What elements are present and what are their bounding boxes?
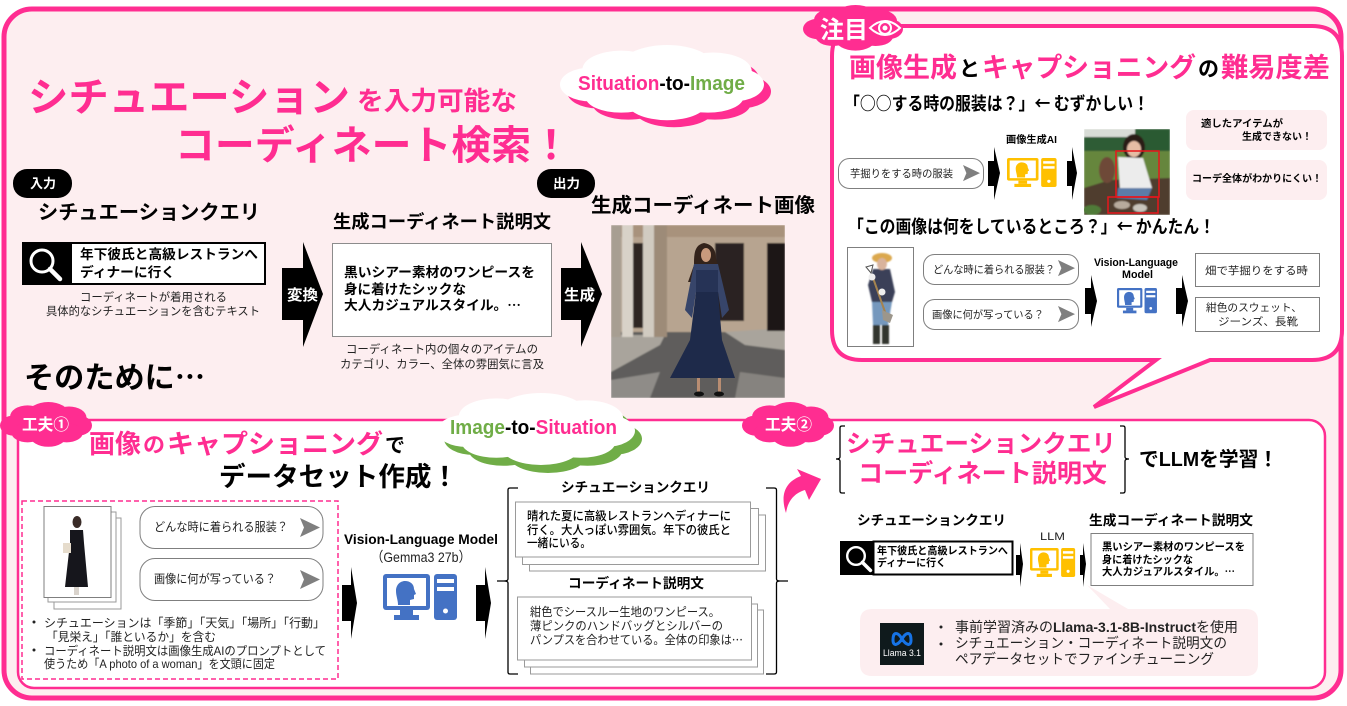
heading: caption dataset: で [385, 435, 405, 457]
callout: hard to see outfit [1186, 160, 1327, 200]
badge: idea 1: 工夫① [22, 411, 69, 435]
prompts: caption questions [924, 254, 1078, 330]
heading: LLM training [836, 426, 1278, 493]
heading: situation query: シチュエーションクエリ [38, 201, 260, 224]
cloud: Situation-to-Image: Situation-to-Image [578, 73, 745, 95]
bullets: ペアデータセットでファインチューニング [955, 651, 1214, 667]
arrow [1016, 543, 1023, 587]
search box small: 年下彼氏と高級レストランへ [877, 544, 1008, 557]
arrow [1085, 275, 1097, 327]
title: シチュエーション [28, 76, 350, 120]
vision language model: Vision-Language [1094, 257, 1178, 269]
arrow: curved pink [784, 469, 821, 513]
photo: woman in navy dress [611, 225, 785, 398]
prompt: digging [838, 158, 984, 188]
arrow: generate [561, 242, 602, 347]
heading: generated description: 生成コーディネート説明文 [333, 211, 551, 232]
notes: コーディネート説明文は画像生成AIのプロンプトとして [44, 643, 326, 658]
vision language model: Gemma3: （Gemma3 27b） [371, 549, 471, 565]
bullets [940, 619, 1238, 667]
search box: ディナーに行く [80, 264, 175, 280]
image generation AI: 画像生成AI [1006, 133, 1057, 146]
badge: idea 2: 工夫② [765, 411, 812, 435]
badge: attention [803, 5, 903, 51]
query caption: 具体的なシチュエーションを含むテキスト [46, 304, 260, 318]
description box small: 大人カジュアルスタイル。… [1102, 564, 1235, 579]
panel: bottom [18, 420, 1325, 688]
description box: 身に着けたシックな [344, 281, 466, 297]
dataset: situation query: 一緒にいる。 [527, 535, 591, 550]
label: situation query: シチュエーションクエリ [857, 513, 1006, 528]
callout: unsuitable items: 適したアイテムが [1201, 117, 1283, 130]
description box small: 身に着けたシックな [1102, 553, 1193, 566]
arrow [1080, 543, 1086, 587]
label: generated description: 生成コーディネート説明文 [1089, 512, 1254, 528]
heading: generated image: 生成コーディネート画像 [591, 193, 815, 217]
logo: Llama 3.1: Llama 3.1 [883, 648, 921, 658]
arrow: convert [282, 242, 323, 347]
description box small [1091, 534, 1253, 586]
query caption [46, 290, 260, 318]
arrow: generate: 生成 [564, 286, 595, 304]
description box: 大人カジュアルスタイル。… [344, 294, 521, 314]
panel: attention bubble [803, 5, 1342, 407]
question 1 [140, 506, 323, 548]
notes [32, 615, 326, 671]
arrow [342, 567, 357, 639]
arrow [1067, 147, 1077, 200]
notes: 使うため「A photo of a woman」を文頭に固定 [44, 656, 275, 671]
title: を入力可能な [357, 86, 517, 116]
query caption: コーディネートが着用される [80, 290, 227, 304]
title [28, 76, 571, 168]
description caption [340, 342, 544, 371]
notes: 「見栄え」「誰といるか」を含む [46, 629, 216, 644]
arrow: convert: 変換 [287, 286, 318, 304]
heading: difficulty gap: の [1198, 58, 1219, 81]
badge: output: 出力 [553, 176, 580, 191]
dataset: coordinate description: コーディネート説明文 [568, 575, 704, 591]
dataset: situation query: 行く。大人っぽい雰囲気。年下の彼氏と [527, 522, 731, 537]
image generation AI [1006, 133, 1057, 187]
question 2 [140, 558, 323, 600]
dataset: situation query: 晴れた夏に高級レストランへディナーに [527, 508, 731, 523]
dataset: situation query [516, 480, 766, 571]
badge: idea 2 [742, 402, 834, 447]
search box: 年下彼氏と高級レストランへ [80, 246, 259, 262]
image stack [44, 506, 121, 609]
callout: unsuitable items: 生成できない！ [1242, 130, 1312, 143]
dataset: situation query: シチュエーションクエリ [561, 480, 710, 495]
logo: Llama 3.1 [880, 623, 924, 665]
prompts: caption questions: 画像に何が写っている？ [932, 308, 1044, 321]
badge: output [537, 169, 595, 198]
heading: difficulty gap: キャプショニング [982, 52, 1196, 83]
vision language model: Model [1122, 269, 1153, 281]
answer boxes [1196, 254, 1320, 332]
icon: LLM computer [1030, 548, 1075, 577]
dataset: coordinate description: 紺色でシースルー生地のワンピース。 [530, 605, 720, 619]
heading: LLM training: コーディネート説明文 [858, 459, 1107, 488]
callout: unsuitable items [1186, 110, 1327, 150]
heading: caption dataset: データセット作成！ [219, 462, 458, 492]
description box [332, 244, 552, 336]
description box: 黒いシアー素材のワンピースを [344, 264, 535, 280]
cloud: Situation-to-Image [560, 45, 771, 127]
question 1: どんな時に着られる服装？ [154, 519, 288, 534]
answer boxes: 紺色のスウェット、 [1206, 301, 1302, 314]
heading: difficulty gap: 画像生成 [849, 53, 957, 83]
heading: caption dataset [89, 429, 458, 492]
bullets: シチュエーション・コーディネート説明文の [955, 635, 1227, 651]
text: therefore: そのために… [24, 353, 205, 397]
heading: difficulty gap [849, 52, 1330, 83]
text: hard question: 「○○する時の服装は？」← むずかしい！ [844, 90, 1149, 116]
dataset: coordinate description: 薄ピンクのハンドバッグとシルバーの [530, 618, 723, 633]
panel: dataset input [22, 501, 338, 679]
search box [22, 242, 265, 285]
callout: Llama [860, 585, 1258, 676]
callout: hard to see outfit: コーデ全体がわかりにくい！ [1192, 172, 1322, 185]
heading: difficulty gap: と [959, 58, 980, 81]
title: コーディネート検索！ [175, 123, 571, 168]
photo: woman digging [1083, 129, 1170, 215]
description box small: 黒いシアー素材のワンピースを [1102, 540, 1245, 553]
answer boxes: ジーンズ、長靴 [1218, 315, 1299, 328]
dataset: coordinate description [518, 575, 764, 674]
heading: difficulty gap: 難易度差 [1221, 53, 1330, 83]
heading: caption dataset: の [143, 434, 165, 457]
prompt: digging: 芋掘りをする時の服装 [850, 167, 953, 180]
text: easy question: 「この画像は何をしているところ？」← かんたん！ [848, 213, 1215, 239]
cloud: Image-to-Situation: Image-to-Situation [450, 417, 617, 439]
vision language model: Gemma3: Vision-Language Model [344, 531, 498, 547]
arrow [476, 567, 491, 639]
cloud: Image-to-Situation [437, 393, 642, 473]
arrow [1176, 275, 1188, 327]
description caption: コーディネート内の個々のアイテムの [346, 342, 538, 356]
badge: idea 1 [0, 402, 92, 447]
prompts: caption questions: どんな時に着られる服装？ [933, 263, 1055, 276]
heading: LLM training: でLLMを学習！ [1139, 448, 1278, 471]
bracket: dataset output [497, 488, 788, 674]
question 2: 画像に何が写っている？ [154, 571, 276, 586]
photo: farmer outfit [848, 248, 914, 346]
badge: attention: 注目 [820, 17, 868, 44]
heading: caption dataset: 画像 [89, 429, 141, 459]
search box small: ディナーに行く [877, 556, 946, 569]
description caption: カテゴリ、カラー、全体の雰囲気に言及 [340, 357, 544, 371]
label: LLM: LLM [1040, 531, 1065, 543]
heading: caption dataset: キャプショニング [167, 429, 383, 459]
bullets: 事前学習済みのLlama-3.1-8B-Instructを使用 [955, 619, 1238, 635]
vision language model: Gemma3 [344, 531, 498, 620]
dataset: coordinate description: パンプスを合わせている。全体の印象は… [530, 631, 743, 648]
answer boxes: 畑で芋掘りをする時 [1205, 264, 1309, 277]
badge: input: 入力 [30, 176, 56, 191]
notes: シチュエーションは「季節」「天気」「場所」「行動」 [44, 615, 325, 630]
badge: input [13, 169, 72, 198]
heading: LLM training: シチュエーションクエリ [846, 430, 1116, 458]
search box small [840, 541, 1012, 575]
arrow [988, 147, 1000, 200]
vision language model [1094, 257, 1178, 313]
